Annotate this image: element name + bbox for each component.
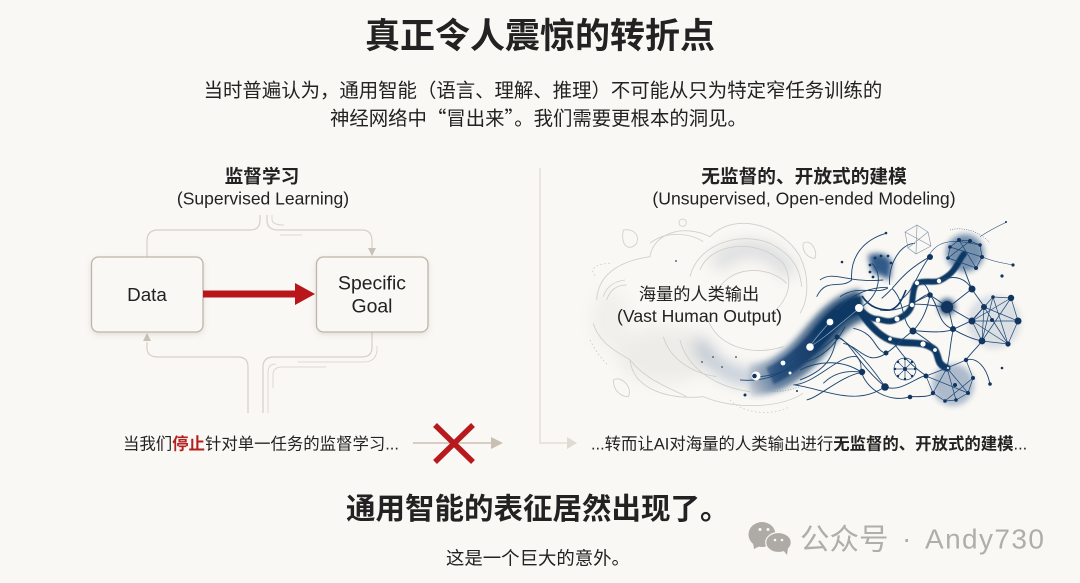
- caption: unsupervised modeling: ...转而让AI对海量的人类输出进行无监督的、开放式的建模...: [591, 434, 1027, 454]
- thin links traced over ribbon base: [740, 308, 885, 396]
- panel: unsupervised open-ended modeling: [590, 166, 1027, 454]
- feedback lines around boxes: [147, 215, 377, 413]
- watermark text: Andy730: [925, 524, 1045, 554]
- white nodes: [752, 279, 949, 380]
- icon: wechat: [748, 522, 791, 555]
- heading: supervised learning: 监督学习: [225, 166, 299, 187]
- network clusters: [894, 225, 1018, 401]
- arrowhead: to data: [143, 333, 151, 341]
- watermark: wechat account: [748, 522, 1045, 556]
- intro paragraph: 神经网络中“冒出来”。我们需要更根本的洞见。: [330, 102, 747, 131]
- watermark text: [800, 523, 1045, 556]
- illustration: swirl cloud of human output: [590, 219, 816, 412]
- intro paragraph: 当时普遍认为，通用智能（语言、理解、推理）不可能从只为特定窄任务训练的: [204, 80, 882, 102]
- intro paragraph: [204, 80, 882, 131]
- box: data: Data: [127, 284, 167, 305]
- heading: unsupervised modeling: [652, 166, 956, 208]
- box: data: [92, 257, 203, 332]
- caption: stop supervised learning: 当我们停止针对单一任务的监督学习...: [123, 434, 399, 454]
- closing note: 这是一个巨大的意外。: [446, 548, 630, 568]
- box: specific goal: Specific: [338, 272, 406, 294]
- label: vast human output: [617, 284, 782, 326]
- divider with arrow: [540, 168, 577, 449]
- flow ribbons: [750, 254, 964, 380]
- title: 真正令人震惊的转折点: [365, 17, 715, 56]
- illustration: blue neural network: [740, 221, 1022, 406]
- heading: supervised learning: (Supervised Learning): [177, 188, 349, 208]
- box: specific goal: [316, 257, 428, 332]
- thin links traced over network: [800, 222, 1013, 400]
- red arrow: data to goal: [203, 283, 315, 305]
- box: specific goal: Goal: [352, 296, 392, 318]
- label: vast human output: 海量的人类输出: [639, 284, 759, 304]
- node: dark centre with halo: [752, 374, 757, 378]
- arrowhead: to goal: [368, 248, 376, 256]
- watermark text: ·: [902, 523, 911, 554]
- heading: supervised learning: [177, 166, 349, 208]
- heading: unsupervised modeling: 无监督的、开放式的建模: [701, 166, 907, 187]
- watermark text: 公众号: [800, 524, 889, 556]
- label: vast human output: (Vast Human Output): [617, 306, 782, 326]
- dark nodes: [744, 221, 1022, 403]
- heading: unsupervised modeling: (Unsupervised, Open-ended Modeling): [652, 188, 956, 208]
- blocked arrow: [413, 425, 503, 462]
- conclusion headline: 通用智能的表征居然出现了。: [346, 493, 730, 526]
- panel: supervised learning: [92, 166, 503, 462]
